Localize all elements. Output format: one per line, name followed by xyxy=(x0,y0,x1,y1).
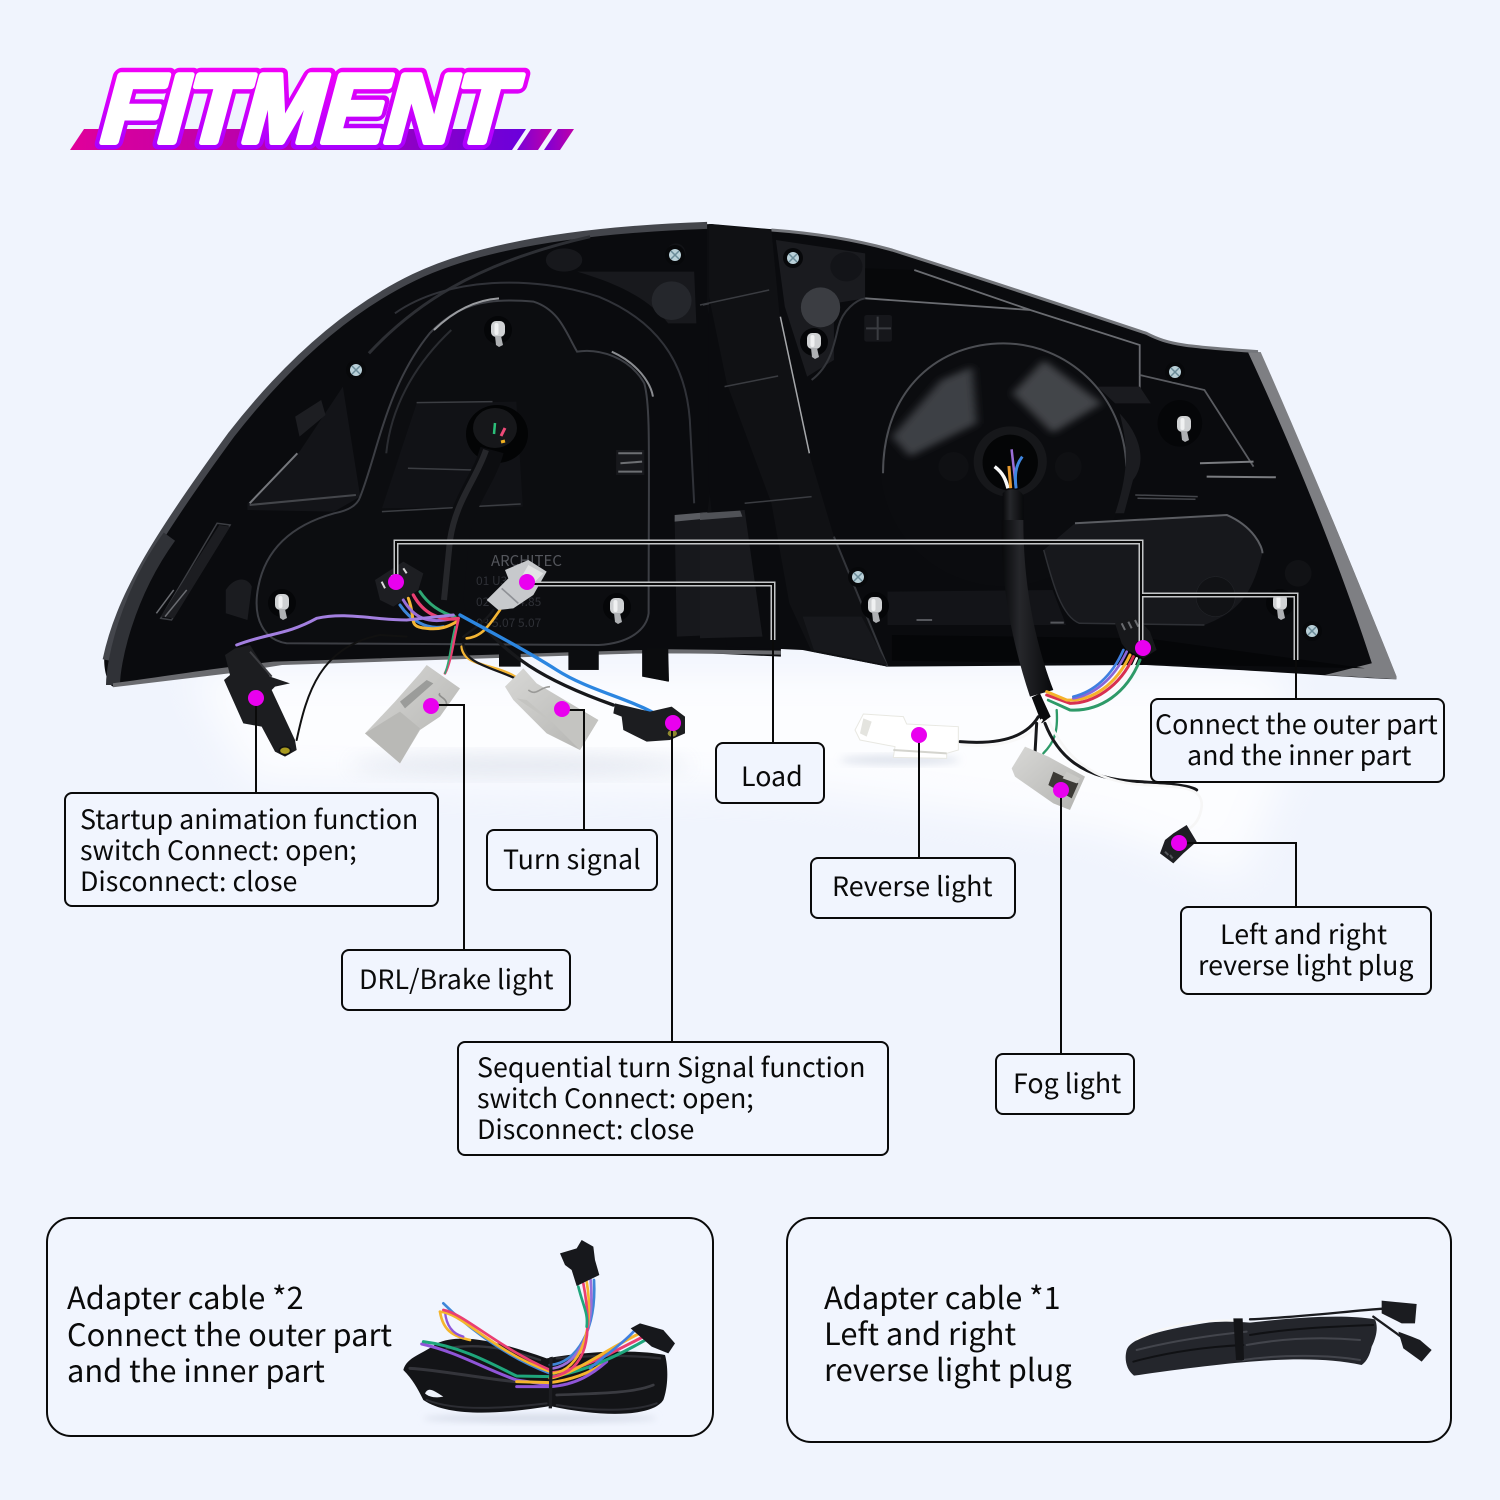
plug xyxy=(1160,825,1197,863)
panel text: Adapter cable *2 xyxy=(67,1273,304,1318)
upper panels xyxy=(776,240,865,377)
callout: startup animation: Disconnect: close xyxy=(80,860,297,899)
title: FITMENT: FITMENT xyxy=(90,55,529,163)
callout: fog light: Fog light xyxy=(1013,1062,1121,1101)
callout: fog light xyxy=(996,1054,1134,1114)
tie xyxy=(549,1357,553,1408)
panel text xyxy=(67,1273,392,1391)
upper cable sheath xyxy=(1003,489,1024,520)
callout: DRL brake xyxy=(342,950,570,1010)
photo: tail light assembly xyxy=(104,224,1396,880)
right wiring harness xyxy=(855,520,1202,863)
floor glow xyxy=(190,670,1290,880)
sheathed cable xyxy=(1002,520,1053,697)
outer-inner connector xyxy=(1115,617,1157,658)
load connector xyxy=(487,560,547,610)
panel text: Left and right xyxy=(824,1309,1016,1354)
callout: sequential turn: Sequential turn Signal function xyxy=(477,1046,865,1085)
startup connector xyxy=(224,645,297,757)
sequential connector xyxy=(613,703,685,742)
panel: adapter cable x2 xyxy=(47,1218,713,1436)
photo: black adapter cable xyxy=(1126,1301,1432,1376)
grommet wires xyxy=(995,449,1022,488)
callout: left and right reverse plug: Left and right xyxy=(1220,913,1387,952)
right lobe of housing xyxy=(700,224,1396,679)
faint embossed text: 01 U37 4.37 xyxy=(476,572,540,589)
right shoulder details xyxy=(1135,495,1198,499)
plugs xyxy=(560,1240,599,1286)
title: FITMENT: FITMENT xyxy=(90,55,529,163)
purple wire xyxy=(237,615,453,645)
panel text xyxy=(824,1273,1072,1390)
centre divider bar, left part xyxy=(707,225,781,647)
callout: sequential turn xyxy=(458,1042,888,1155)
left grommet and cable xyxy=(444,405,528,625)
turn signal connector xyxy=(505,668,598,750)
callout: DRL brake: DRL/Brake light xyxy=(359,958,553,997)
callout: connect outer and inner: and the inner part xyxy=(1187,734,1411,773)
callout: connect outer and inner: Connect the outer part xyxy=(1155,703,1438,742)
reflector disc xyxy=(880,343,1141,586)
lens edge xyxy=(1248,352,1396,679)
faint embossed text: ARCHITEC xyxy=(491,550,562,571)
callout: connect outer and inner xyxy=(1151,699,1444,782)
callout: startup animation xyxy=(65,793,438,906)
reverse light plug xyxy=(855,714,958,758)
callout: turn signal: Turn signal xyxy=(503,838,641,877)
socket connector xyxy=(375,562,423,607)
fog light connector xyxy=(1012,747,1085,810)
panel text: Connect the outer part xyxy=(67,1310,392,1355)
centre divider bar, right part xyxy=(709,224,887,667)
left side panel xyxy=(247,387,360,512)
leader lines xyxy=(256,542,1296,1054)
right block xyxy=(675,511,755,637)
lens ribbon xyxy=(106,225,707,660)
callout: startup animation: Startup animation function xyxy=(80,798,418,837)
panel text: Adapter cable *1 xyxy=(824,1273,1061,1318)
bolts and screws xyxy=(268,245,1322,641)
callout: reverse light xyxy=(811,858,1015,918)
callout: reverse light: Reverse light xyxy=(832,865,993,904)
black switch lead xyxy=(297,635,407,740)
faint embossed text xyxy=(476,550,562,631)
top wedge panels xyxy=(577,272,696,323)
faint embossed text: 03 5.07 5.07 xyxy=(476,614,542,631)
inner dome xyxy=(257,300,649,645)
panel text: reverse light plug xyxy=(824,1345,1072,1390)
left wiring harness xyxy=(224,560,685,763)
callout: sequential turn: Disconnect: close xyxy=(477,1108,694,1147)
callout: turn signal xyxy=(487,830,657,890)
centre panels and glints xyxy=(382,402,523,508)
connector markers xyxy=(248,574,1187,851)
callout: load: Load xyxy=(741,755,803,794)
left lobe of housing xyxy=(104,224,781,687)
DRL connector xyxy=(365,665,460,763)
wires xyxy=(422,1344,550,1385)
lower band xyxy=(887,590,1066,625)
callout: sequential turn: switch Connect: open; xyxy=(477,1077,754,1116)
callout: left and right reverse plug: reverse light plug xyxy=(1198,944,1414,983)
callout: startup animation: switch Connect: open; xyxy=(80,829,357,868)
panel: adapter cable x1 xyxy=(787,1218,1451,1442)
lower plate xyxy=(1044,515,1262,625)
centre junction wires xyxy=(445,620,458,673)
faint embossed text: 02 4.85 4.85 xyxy=(476,593,542,610)
callout: left and right reverse plug xyxy=(1181,907,1431,994)
colored ribbon xyxy=(1048,660,1140,710)
split wires xyxy=(960,717,1038,742)
outer ring line xyxy=(395,283,694,503)
callout: load xyxy=(716,743,824,803)
photo: multicolour adapter cable xyxy=(403,1240,675,1422)
panel text: and the inner part xyxy=(67,1346,325,1391)
